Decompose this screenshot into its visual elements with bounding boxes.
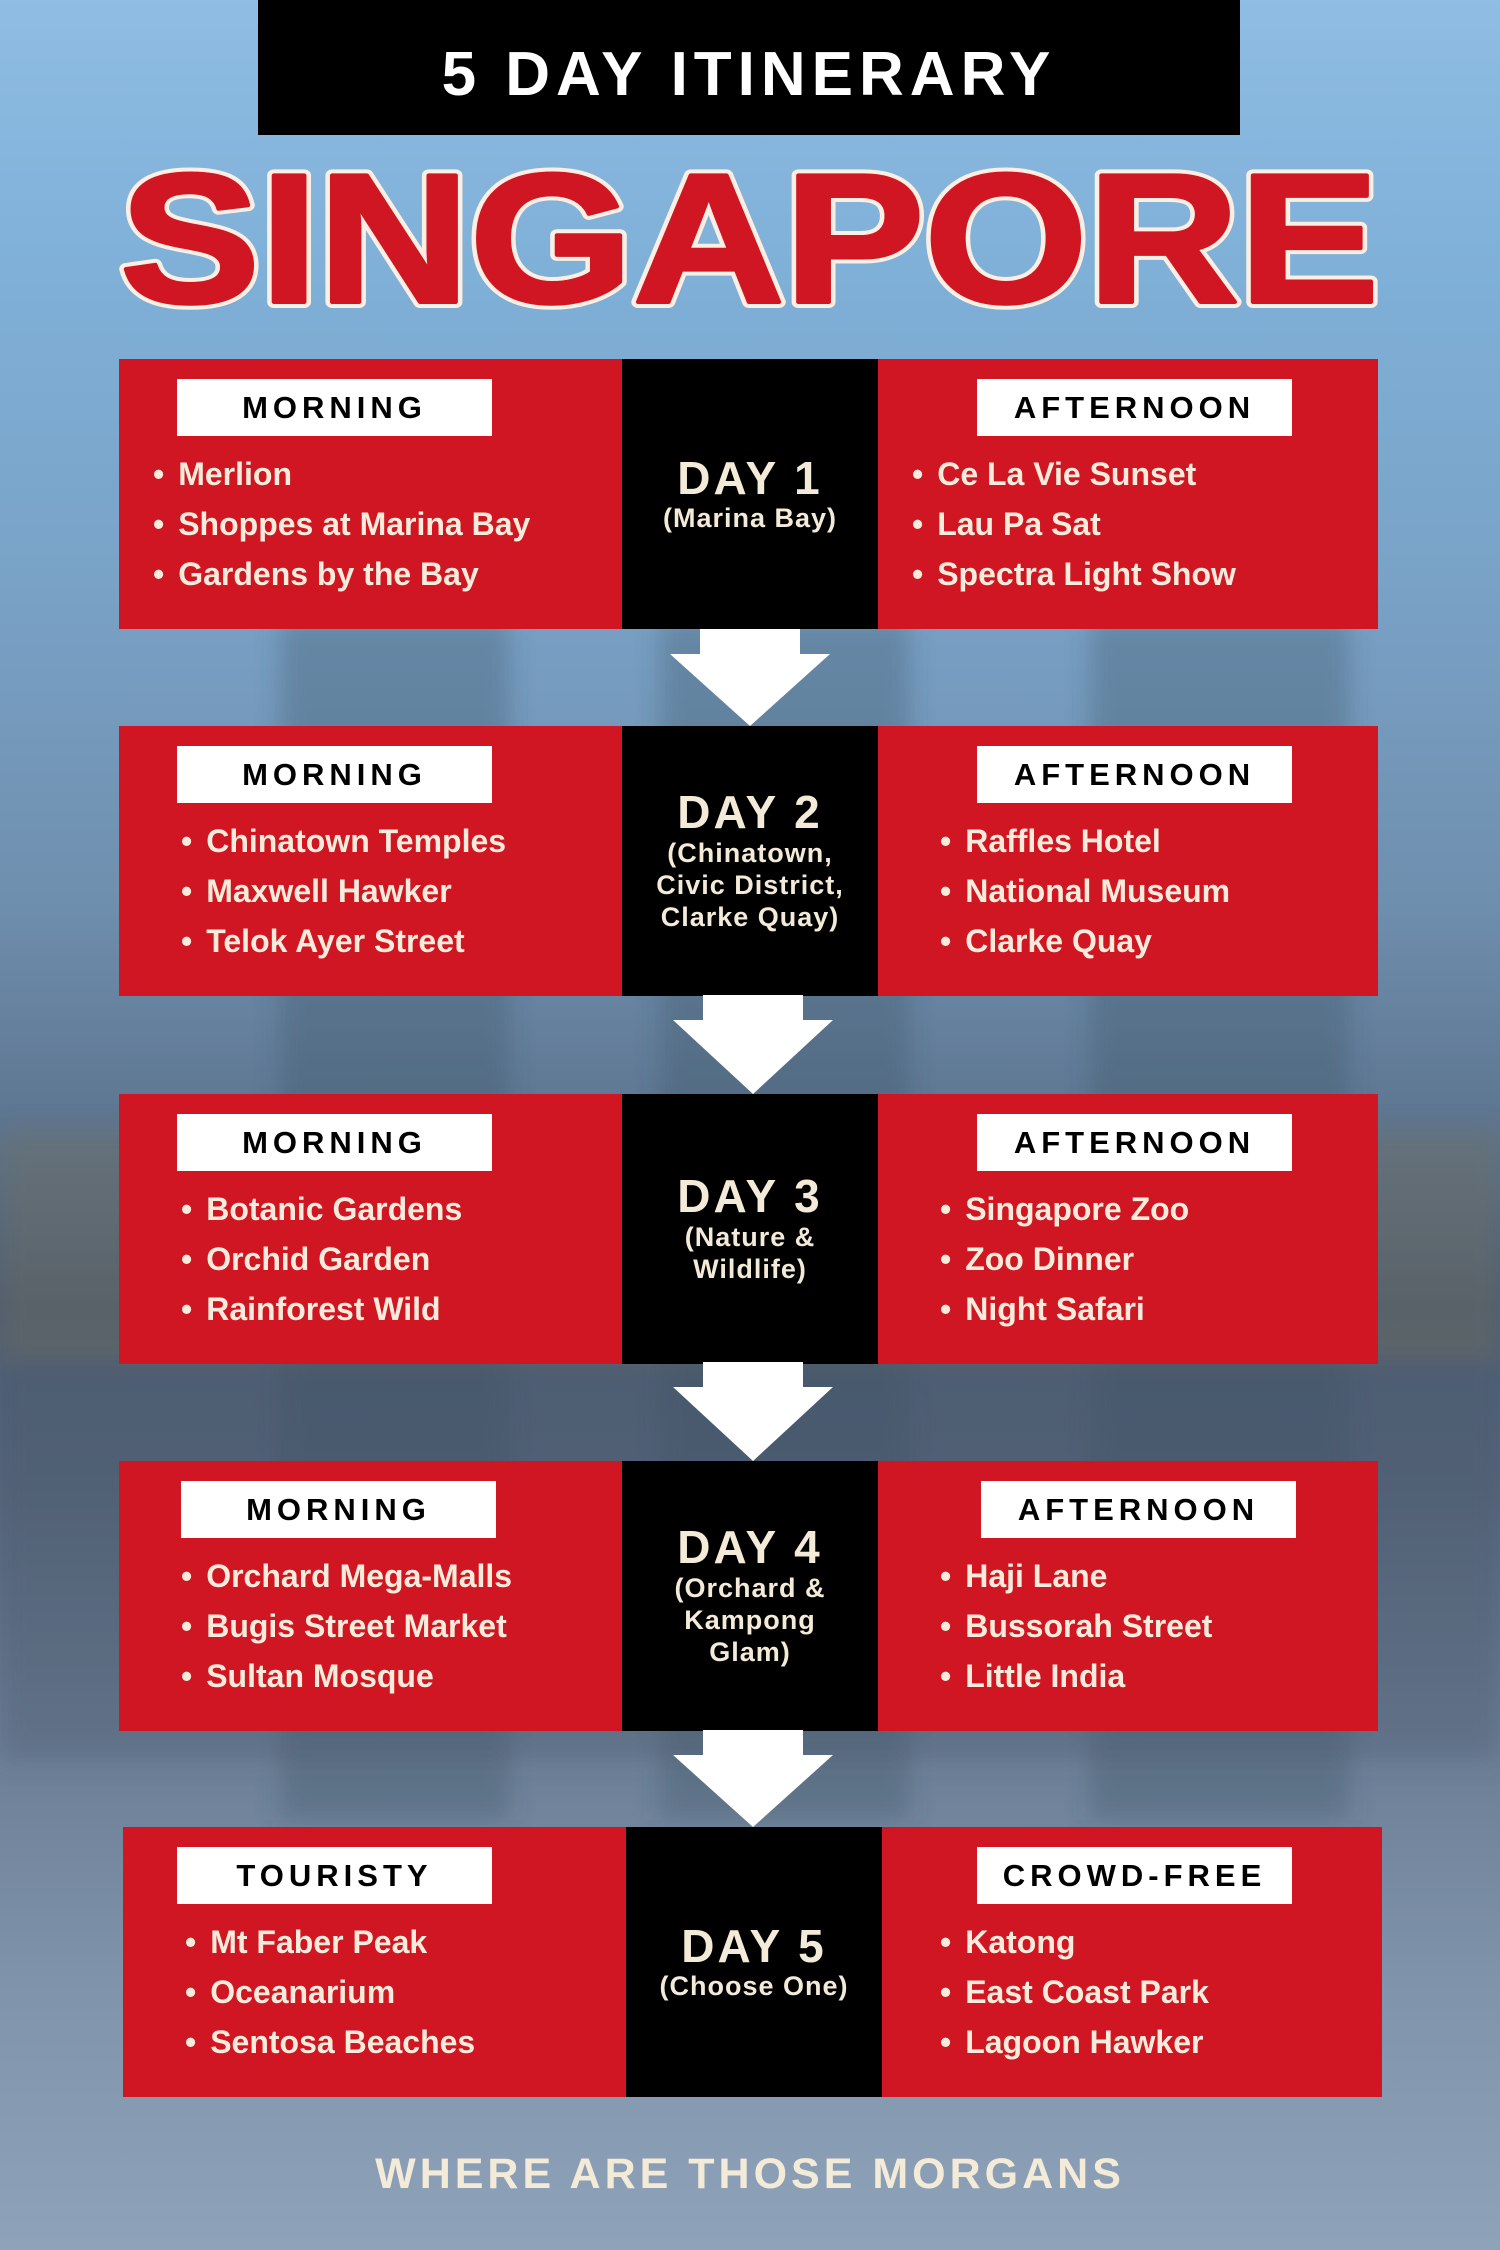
day 4 center: Glam) — [709, 1637, 791, 1667]
day 4 center: (Orchard & — [674, 1573, 826, 1603]
label: afternoon: AFTERNOON — [1014, 390, 1255, 425]
list: morning day 1 — [154, 456, 530, 592]
list: afternoon day 4: Haji Lane — [965, 1558, 1107, 1594]
label: afternoon: AFTERNOON — [1014, 1125, 1255, 1160]
label: morning — [177, 379, 492, 436]
day 5 — [123, 1827, 1382, 2097]
label: touristy — [177, 1847, 492, 1904]
list: afternoon day 4: Bussorah Street — [965, 1608, 1212, 1644]
label: morning — [177, 746, 492, 803]
day 3 — [119, 1094, 1378, 1364]
day 5 center — [626, 1827, 882, 2097]
list: morning day 1: Merlion — [178, 456, 292, 492]
title bar — [258, 0, 1240, 135]
day 4 center: DAY 4 — [677, 1521, 823, 1573]
list: crowd-free: Lagoon Hawker — [965, 2024, 1203, 2060]
list: crowd-free — [941, 1924, 1209, 2060]
list: afternoon day 1: Spectra Light Show — [937, 556, 1236, 592]
label: morning: MORNING — [246, 1492, 431, 1527]
day 5 center: DAY 5 — [681, 1920, 827, 1972]
list: afternoon day 2: National Museum — [965, 873, 1230, 909]
label: afternoon: AFTERNOON — [1014, 757, 1255, 792]
list: afternoon day 2: Clarke Quay — [965, 923, 1152, 959]
list: morning day 1: Shoppes at Marina Bay — [178, 506, 530, 542]
list: afternoon day 4 — [941, 1558, 1212, 1694]
label: touristy: TOURISTY — [236, 1858, 433, 1893]
label: morning: MORNING — [242, 1125, 427, 1160]
list: morning day 2 — [182, 823, 506, 959]
arrow 2 — [673, 995, 833, 1094]
list: afternoon day 1 — [913, 456, 1236, 592]
day 2 center: Clarke Quay) — [661, 902, 839, 932]
list: afternoon day 3: Night Safari — [965, 1291, 1145, 1327]
list: afternoon day 4: Little India — [965, 1658, 1125, 1694]
list: morning day 3: Orchid Garden — [206, 1241, 430, 1277]
day 3 center: DAY 3 — [677, 1170, 823, 1222]
label: morning: MORNING — [242, 390, 427, 425]
list: touristy: Sentosa Beaches — [210, 2024, 475, 2060]
day 2 center — [622, 726, 878, 996]
list: afternoon day 1: Ce La Vie Sunset — [937, 456, 1196, 492]
label: afternoon: AFTERNOON — [1018, 1492, 1259, 1527]
list: afternoon day 2: Raffles Hotel — [965, 823, 1161, 859]
label: crowd-free — [977, 1847, 1292, 1904]
label: afternoon — [977, 1114, 1292, 1171]
list: touristy: Mt Faber Peak — [210, 1924, 427, 1960]
list: afternoon day 1: Lau Pa Sat — [937, 506, 1101, 542]
day 1 — [119, 359, 1378, 629]
list: morning day 2: Maxwell Hawker — [206, 873, 452, 909]
label: morning: MORNING — [242, 757, 427, 792]
day 1 center: DAY 1 — [677, 452, 823, 504]
label: morning — [177, 1114, 492, 1171]
day 2 — [119, 726, 1378, 996]
day 1 center — [622, 359, 878, 629]
list: afternoon day 3 — [941, 1191, 1189, 1327]
list: touristy — [186, 1924, 475, 2060]
label: afternoon — [977, 379, 1292, 436]
list: morning day 2: Telok Ayer Street — [206, 923, 465, 959]
day 5 center: (Choose One) — [659, 1971, 848, 2001]
day 2 center: (Chinatown, — [667, 838, 833, 868]
day 3 center: (Nature & — [685, 1222, 815, 1252]
list: morning day 4: Bugis Street Market — [206, 1608, 507, 1644]
day 1 center: (Marina Bay) — [663, 503, 837, 533]
list: crowd-free: Katong — [965, 1924, 1075, 1960]
list: morning day 4 — [182, 1558, 512, 1694]
day 4 center — [622, 1461, 878, 1731]
list: morning day 4: Sultan Mosque — [206, 1658, 434, 1694]
list: morning day 3 — [182, 1191, 462, 1327]
list: morning day 4: Orchard Mega-Malls — [206, 1558, 512, 1594]
day 4 center: Kampong — [684, 1605, 816, 1635]
arrow 3 — [673, 1362, 833, 1461]
label: crowd-free: CROWD-FREE — [1003, 1858, 1266, 1893]
day 2 center: Civic District, — [656, 870, 844, 900]
label: morning — [181, 1481, 496, 1538]
day 3 center — [622, 1094, 878, 1364]
title bar: 5 DAY ITINERARY — [442, 40, 1056, 109]
label: afternoon — [981, 1481, 1296, 1538]
list: afternoon day 3: Zoo Dinner — [965, 1241, 1134, 1277]
arrow 1 — [670, 629, 830, 726]
list: morning day 3: Botanic Gardens — [206, 1191, 462, 1227]
list: morning day 2: Chinatown Temples — [206, 823, 506, 859]
day 4 — [119, 1461, 1378, 1731]
list: afternoon day 3: Singapore Zoo — [965, 1191, 1189, 1227]
list: touristy: Oceanarium — [210, 1974, 395, 2010]
list: crowd-free: East Coast Park — [965, 1974, 1209, 2010]
arrow 4 — [673, 1730, 833, 1827]
list: morning day 3: Rainforest Wild — [206, 1291, 441, 1327]
list: morning day 1: Gardens by the Bay — [178, 556, 479, 592]
label: afternoon — [977, 746, 1292, 803]
footer: WHERE ARE THOSE MORGANS — [375, 2150, 1125, 2198]
day 3 center: Wildlife) — [693, 1254, 807, 1284]
day 2 center: DAY 2 — [677, 786, 823, 838]
list: afternoon day 2 — [941, 823, 1230, 959]
